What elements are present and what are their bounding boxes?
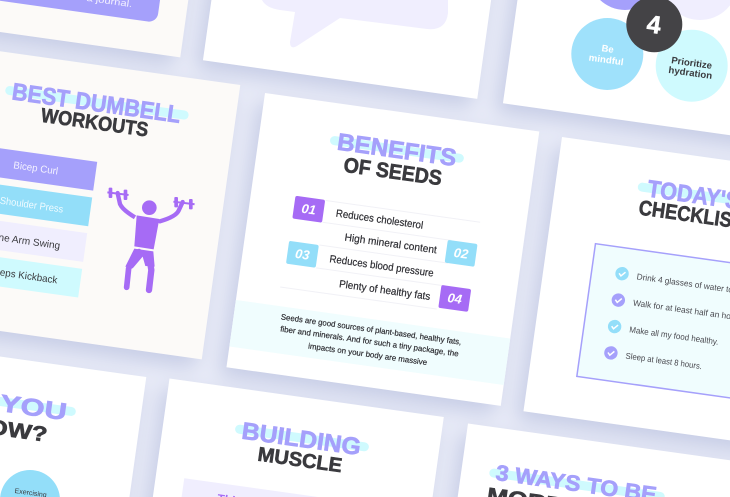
title: did you know	[0, 380, 77, 450]
title: building muscle: BUILDING	[240, 418, 363, 461]
panel: top left journal card	[0, 0, 219, 57]
row 02: High mineral content	[344, 232, 438, 256]
panel: benefits of seeds	[226, 93, 539, 406]
panel: best dumbell workouts	[0, 46, 240, 359]
title: benefits of seeds	[325, 128, 466, 193]
callout: seeds description: Seeds are good sources of plant-based, healthy fats,	[280, 312, 462, 347]
row 02	[343, 226, 478, 267]
circle: exercising fact	[0, 470, 60, 497]
panel: did you know	[0, 338, 146, 497]
panel: top right card with circles	[503, 0, 730, 142]
icon: person lifting dumbbells	[107, 188, 195, 290]
text panel	[168, 478, 402, 497]
list: workouts: Shoulder Press	[0, 196, 64, 216]
list: workouts: Bicep Curl	[13, 160, 59, 177]
callout: seeds description: fiber and minerals. And for such a tiny package, the	[280, 324, 460, 359]
row 01: Reduces cholesterol	[335, 208, 424, 232]
row 03: Reduces blood pressure	[329, 253, 434, 280]
circle: be mindful: Be	[601, 43, 614, 56]
row 01	[292, 196, 425, 237]
title: today's checklist	[633, 174, 730, 234]
circle: be mindful	[571, 18, 643, 90]
checklist box: Make all my food healthy.	[629, 324, 719, 347]
callout: seeds description	[229, 300, 510, 385]
circle: prioritize hydration	[656, 30, 728, 102]
title: benefits of seeds: OF SEEDS	[342, 154, 443, 190]
row 04: 04	[447, 290, 464, 307]
checklist box: Sleep at least 8 hours.	[625, 351, 703, 371]
row 04	[338, 271, 471, 312]
badge: number 4: 4	[645, 10, 663, 40]
title: best dumbell workouts	[1, 78, 190, 147]
badge: number 4	[626, 0, 682, 52]
title: building muscle	[231, 417, 371, 481]
circle: be mindful: mindful	[588, 53, 624, 68]
panel: building muscle	[131, 378, 444, 497]
circle: prioritize hydration: hydration	[668, 65, 713, 82]
row 03	[286, 241, 435, 284]
row 02: 02	[453, 245, 470, 262]
panel: top center speech bubble card	[203, 0, 516, 99]
checklist box	[577, 244, 730, 402]
title: building muscle: MUSCLE	[256, 444, 343, 477]
panel: 3 ways to be more active	[429, 424, 730, 497]
title: benefits of seeds: BENEFITS	[335, 129, 458, 172]
icon: speech bubble	[262, 0, 448, 47]
circle: prioritize hydration: Prioritize	[671, 55, 713, 72]
row 01: 01	[301, 201, 317, 218]
title: best dumbell workouts: BEST DUMBELL	[10, 78, 182, 129]
list: workouts	[0, 142, 97, 298]
row 04: Plenty of healthy fats	[338, 278, 431, 303]
panel: today's checklist	[523, 137, 730, 450]
row 03: 03	[294, 246, 311, 263]
callout: seeds description: impacts on your body are massive	[308, 342, 428, 367]
title: best dumbell workouts: WORKOUTS	[40, 105, 150, 142]
